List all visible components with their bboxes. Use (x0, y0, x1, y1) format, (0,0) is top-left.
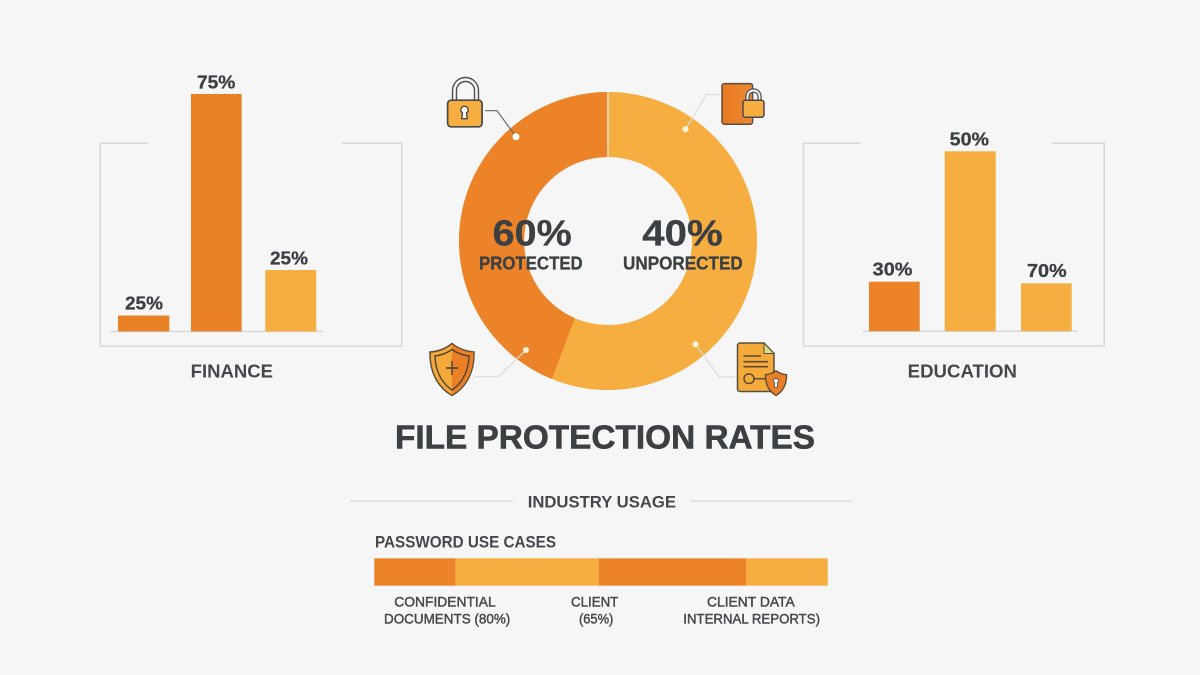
label: client: (65%) (579, 610, 613, 626)
bar: education 30%: 30% (873, 260, 912, 280)
segment: unprotected (492, 124, 724, 358)
label: education: EDUCATION (908, 362, 1017, 382)
bar: finance 75%: 75% (197, 73, 235, 93)
label: client (571, 593, 619, 626)
label: finance: FINANCE (191, 362, 273, 382)
bar: finance 75% (191, 73, 242, 331)
bar: finance 25%: 25% (125, 294, 163, 314)
segment: protected (459, 92, 607, 379)
divider (607, 92, 609, 158)
panel: education bar chart (804, 130, 1104, 382)
value: 60% protected: 60% (493, 213, 572, 254)
icon: padlock (448, 80, 482, 127)
label: client: CLIENT (571, 593, 619, 609)
value: 40% unprotected: UNPORECTED (623, 254, 743, 274)
label: client data internal reports: INTERNAL REPORTS) (683, 610, 820, 626)
bar: education 70% (1021, 261, 1072, 331)
bar: education 50% (945, 130, 996, 331)
connector: document (692, 341, 735, 377)
label: confidential documents: DOCUMENTS (80%) (384, 610, 510, 626)
bar: finance 25% second (265, 249, 316, 332)
bar: education 30% (869, 260, 920, 331)
section heading: industry usage: INDUSTRY USAGE (528, 492, 676, 511)
title: FILE PROTECTION RATES (395, 418, 815, 456)
label: client data internal reports: CLIENT DATA (707, 593, 795, 609)
bar: finance 25% (118, 294, 169, 332)
connector: padlock (485, 111, 520, 140)
label: confidential documents: CONFIDENTIAL (394, 593, 496, 609)
label: client data internal reports (683, 593, 820, 626)
icon: tablet with lock (722, 84, 764, 124)
stacked bar (374, 558, 828, 586)
label: confidential documents (384, 593, 510, 626)
icon: document with key and shield (738, 343, 787, 396)
panel: finance bar chart (100, 73, 402, 381)
bar: finance 25% second: 25% (270, 249, 308, 269)
icon: shield (430, 344, 474, 396)
value: 40% unprotected (623, 213, 743, 274)
value: 60% protected (479, 213, 583, 274)
panel: password use cases (374, 534, 828, 626)
value: 40% unprotected: 40% (642, 213, 723, 254)
connector: shield (474, 347, 529, 377)
value: 60% protected: PROTECTED (479, 254, 583, 274)
bar: education 70%: 70% (1027, 261, 1067, 281)
donut chart (459, 92, 743, 379)
connector: tablet lock (682, 94, 720, 132)
bar: education 50%: 50% (950, 130, 989, 150)
heading: password use cases: PASSWORD USE CASES (375, 534, 556, 552)
